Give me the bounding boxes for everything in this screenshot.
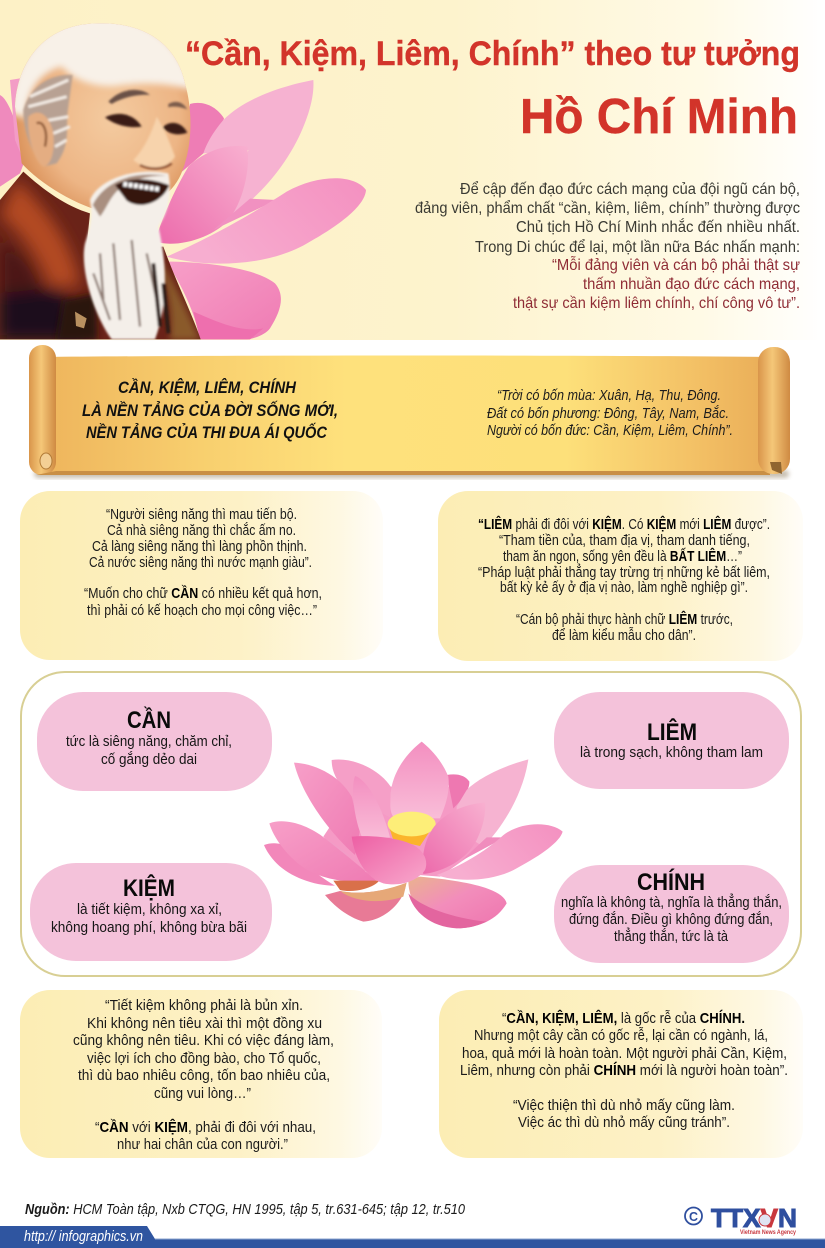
panel: quote on Cần: Cả nước siêng năng thì nước mạnh giàu”. [89, 554, 312, 571]
panel: quote on Liêm: bất kỳ kẻ ấy ở địa vị nào, làm nghề nghiệp gì”. [500, 579, 748, 596]
logo: TTXVN Vietnam News Agency [685, 1203, 797, 1236]
panel: quote on Kiệm: cũng không nên tiêu. Khi có việc đáng làm, [73, 1032, 334, 1049]
panel: quote on Kiệm: cũng vui lòng…” [154, 1085, 251, 1102]
title: Hồ Chí Minh [520, 90, 798, 144]
panel: quote on Chính: Nhưng một cây cần có gốc rễ, lại cần có ngành, lá, [474, 1027, 768, 1044]
logo: TTXVN Vietnam News Agency: C [689, 1209, 699, 1224]
source note: Nguồn: HCM Toàn tập, Nxb CTQG, HN 1995, tập 5, tr.631-645; tập 12, tr.510 [25, 1201, 466, 1218]
scroll heading: CẦN, KIỆM, LIÊM, CHÍNH [118, 378, 297, 397]
scroll quote: “Trời có bốn mùa: Xuân, Hạ, Thu, Đông. [497, 387, 721, 404]
panel: quote on Chính [439, 990, 803, 1158]
panel: quote on Cần [20, 491, 383, 660]
scroll quote [487, 387, 733, 439]
scroll heading: LÀ NỀN TẢNG CỦA ĐỜI SỐNG MỚI, [82, 401, 338, 420]
definition: Kiệm [30, 863, 272, 961]
panel: quote on Liêm: “Cán bộ phải thực hành chữ LIÊM trước, [516, 610, 733, 628]
panel: quote on Cần: “Người siêng năng thì mau tiến bộ. [106, 506, 297, 523]
intro text block: “Mỗi đảng viên và cán bộ phải thật sự [552, 255, 800, 274]
panel: quote on Kiệm [20, 990, 382, 1158]
illustration: portrait of President Ho Chi Minh [0, 17, 201, 340]
definition: Chính: nghĩa là không tà, nghĩa là thẳng thắn, [561, 893, 782, 911]
logo: TTXVN Vietnam News Agency: TTXVN [711, 1203, 797, 1233]
definition: Cần: CẦN [127, 706, 171, 734]
footer bar with website: http:// infographics.vn [24, 1228, 143, 1245]
panel: quote on Kiệm: Khi không nên tiêu xài thì một đồng xu [87, 1015, 322, 1032]
panel: quote on Liêm: “LIÊM phải đi đôi với KIỆM. Có KIỆM mới LIÊM được”. [478, 515, 770, 533]
definition: Liêm: LIÊM [647, 718, 697, 746]
panel: quote on Liêm: “Tham tiền của, tham địa vị, tham danh tiếng, [499, 532, 750, 549]
panel: quote on Liêm [438, 491, 803, 661]
panel: parchment scroll banner [29, 345, 790, 478]
definition: Cần: tức là siêng năng, chăm chỉ, [66, 734, 232, 750]
scroll heading: NỀN TẢNG CỦA THI ĐUA ÁI QUỐC [86, 423, 328, 442]
illustration: pink lotus behind portrait [0, 78, 366, 339]
intro text block [415, 180, 800, 312]
illustration: central lotus flower [264, 742, 563, 928]
scroll quote: Đất có bốn phương: Đông, Tây, Nam, Bắc. [487, 405, 729, 422]
definition: Cần: cố gắng dẻo dai [101, 751, 197, 768]
definition: Liêm: là trong sạch, không tham lam [580, 745, 763, 761]
footer bar with website [0, 1226, 825, 1248]
panel: four virtues frame [21, 672, 801, 976]
panel: quote on Liêm: tham ăn ngon, sống yên đều là BẤT LIÊM…” [503, 547, 742, 565]
panel: quote on Chính: “Việc thiện thì dù nhỏ mấy cũng làm. [513, 1097, 735, 1114]
panel: quote on Kiệm: “CẦN với KIỆM, phải đi đôi với nhau, [95, 1118, 316, 1136]
panel: quote on Cần: “Muốn cho chữ CẦN có nhiều kết quả hơn, [84, 585, 322, 602]
definition: Kiệm: là tiết kiệm, không xa xỉ, [77, 902, 222, 918]
intro text block: Để cập đến đạo đức cách mạng của đội ngũ cán bộ, [460, 180, 800, 198]
definition: Liêm [554, 692, 789, 789]
panel: quote on Chính: hoa, quả mới là hoàn toàn. Một người phải Cần, Kiệm, [462, 1045, 787, 1062]
definition: Chính: đứng đắn. Điều gì không đứng đắn, [569, 911, 773, 928]
definition: Kiệm: không hoang phí, không bừa bãi [51, 920, 247, 936]
panel: quote on Chính: “CẦN, KIỆM, LIÊM, là gốc rễ của CHÍNH. [502, 1009, 745, 1027]
scroll quote: Người có bốn đức: Cần, Kiệm, Liêm, Chính”. [487, 422, 733, 439]
panel: quote on Liêm: “Pháp luật phải thẳng tay trừng trị những kẻ bất liêm, [478, 563, 770, 581]
panel: quote on Cần: Cả làng siêng năng thì làng phồn thịnh. [92, 538, 307, 555]
title [185, 35, 800, 144]
definition: Chính: thẳng thắn, tức là tà [614, 927, 729, 945]
intro text block: thấm nhuần đạo đức cách mạng, [583, 276, 800, 293]
panel: quote on Chính: Liêm, nhưng còn phải CHÍNH mới là người hoàn toàn”. [460, 1062, 788, 1079]
header background [0, 0, 825, 340]
panel: quote on Cần: Cả nhà siêng năng thì chắc ấm no. [107, 522, 296, 539]
panel: quote on Kiệm: “Tiết kiệm không phải là bủn xỉn. [105, 997, 303, 1014]
logo: TTXVN Vietnam News Agency: Vietnam News Agency [740, 1230, 797, 1236]
intro text block: thật sự cần kiệm liêm chính, chí công vô tư”. [513, 295, 800, 312]
intro text block: Chủ tịch Hồ Chí Minh nhắc đến nhiều nhất. [516, 217, 800, 236]
definition: Chính [554, 865, 789, 963]
panel: quote on Kiệm: thì dù bao nhiêu công, tốn bao nhiêu của, [78, 1067, 330, 1084]
panel: quote on Chính: Việc ác thì dù nhỏ mấy cũng tránh”. [518, 1114, 730, 1131]
panel: quote on Kiệm: như hai chân của con người.” [117, 1136, 288, 1153]
panel: quote on Cần: thì phải có kế hoạch cho mọi công việc…” [87, 602, 317, 619]
panel: quote on Liêm: để làm kiểu mẫu cho dân”. [552, 627, 696, 644]
scroll heading [82, 378, 338, 442]
definition: Chính: CHÍNH [637, 868, 705, 896]
intro text block: đảng viên, phẩm chất “cần, kiệm, liêm, chính” thường được [415, 199, 800, 217]
panel: quote on Kiệm: việc lợi ích cho đồng bào, cho Tổ quốc, [87, 1050, 321, 1067]
title: “Cần, Kiệm, Liêm, Chính” theo tư tưởng [185, 35, 800, 73]
definition: Kiệm: KIỆM [123, 874, 175, 902]
definition: Cần [37, 692, 272, 791]
intro text block: Trong Di chúc để lại, một lần nữa Bác nhấn mạnh: [475, 238, 800, 256]
